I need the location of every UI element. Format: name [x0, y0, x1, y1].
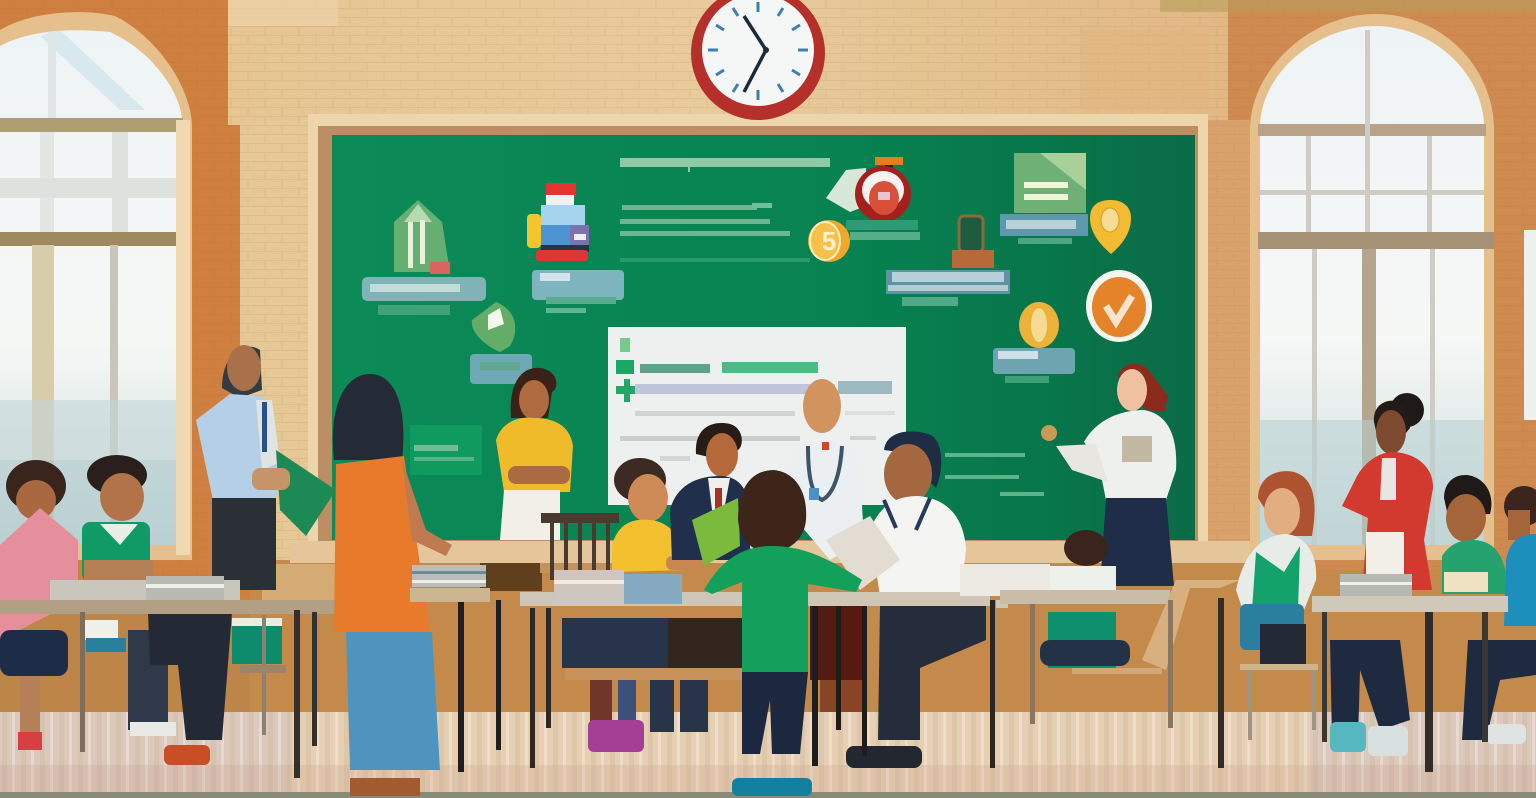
right arched window: [1250, 14, 1536, 560]
student: far right child in blue: [1462, 486, 1536, 744]
lower wall and ledge: [0, 541, 1536, 715]
icon: gold coin five: 5: [822, 226, 836, 256]
right desk and paper stack: [960, 530, 1240, 768]
child in green from behind: [704, 470, 862, 796]
doctor: bald man in white coat: [786, 379, 864, 560]
student: red-haired girl in green vest: [1236, 471, 1316, 664]
woman teacher in white shirt with red hair: [1041, 363, 1176, 586]
student: boy in green right: [1442, 475, 1506, 594]
icon: orange check shield: [1086, 270, 1152, 342]
chalkboard frame: [308, 114, 1208, 550]
student: left girl in pink: [0, 460, 78, 750]
student: boy in navy blazer: [670, 423, 750, 566]
centre desk with books: [520, 570, 1008, 768]
icon: plant pot: [886, 216, 1010, 306]
wall clock: [691, 0, 825, 120]
student: standing girl in red jacket: [1330, 393, 1433, 756]
green note text lower right: [945, 453, 1044, 496]
icon: yellow badge upper right: [1090, 200, 1131, 254]
chalkboard: [332, 135, 1195, 540]
green note text lower left: [410, 425, 482, 475]
icon: green document badge: [362, 200, 486, 315]
icon: gold coin five: [808, 220, 850, 262]
floor: [0, 712, 1536, 798]
board heading: [620, 158, 830, 172]
student: girl in yellow at board: [496, 368, 573, 540]
woman in orange dress from behind: [333, 374, 452, 796]
teacher: man in blue shirt: [148, 345, 336, 765]
left desk with books: [0, 576, 340, 778]
icon: red stopwatch: [826, 157, 920, 240]
board text lines: [620, 203, 810, 262]
icon: leaf badge: [470, 302, 532, 384]
icon: water bottle: [527, 183, 624, 313]
icon: gold coin lower right: [993, 302, 1075, 383]
icon: green folder card: [1000, 153, 1088, 244]
right desk with books: [1240, 574, 1508, 772]
nurse: seated doctor in white with navy cap: [826, 431, 986, 768]
white poster on board: [608, 327, 906, 505]
stacked books on desk centre left: [410, 565, 501, 772]
left arched window: [0, 12, 192, 560]
student: seated child in yellow with chair: [541, 458, 742, 752]
student: left boy in green: [82, 455, 176, 736]
